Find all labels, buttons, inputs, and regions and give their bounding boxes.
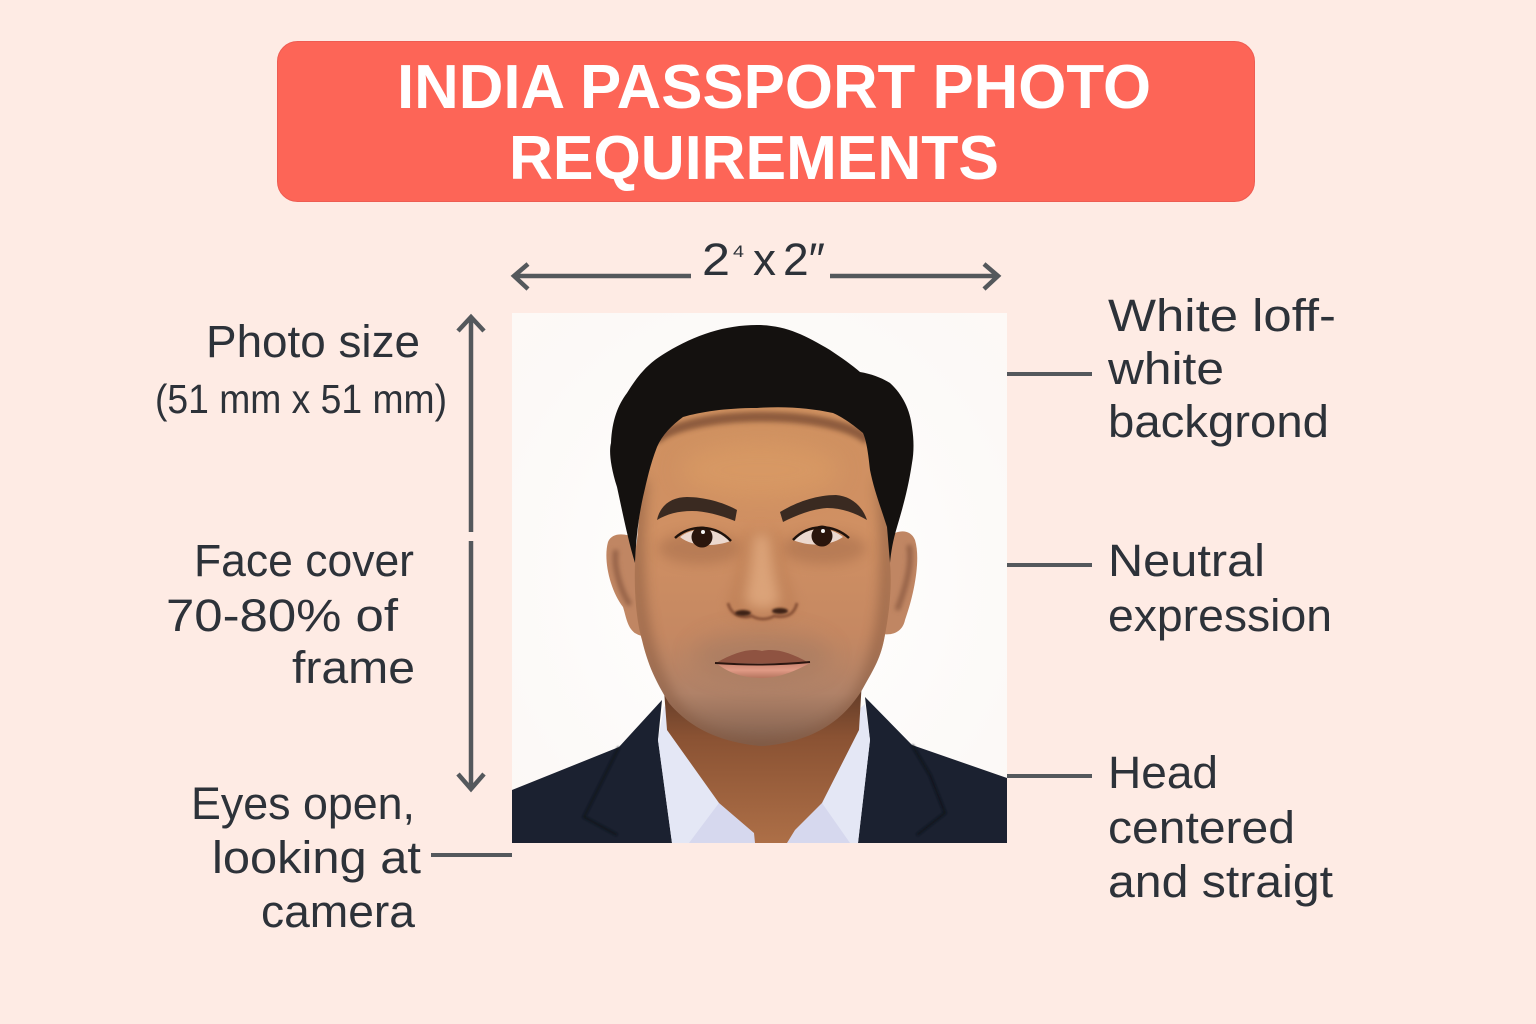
title banner <box>278 42 1254 202</box>
left label: photo size <box>155 316 447 422</box>
left label: face cover <box>166 535 415 693</box>
left label: eyes open: camera <box>261 886 416 937</box>
vertical arrow down <box>458 541 484 789</box>
connector: eyes <box>431 853 512 857</box>
mouth <box>715 650 810 678</box>
title banner: INDIA PASSPORT PHOTO <box>397 53 1151 122</box>
connector: background <box>1007 372 1092 376</box>
suit jacket <box>512 697 1007 843</box>
right label: head: and straigt <box>1108 856 1334 907</box>
width dimension arrow: 2 <box>702 234 730 285</box>
left label: face cover: frame <box>292 642 415 693</box>
right label: background: backgrond <box>1108 396 1329 447</box>
left label: eyes open: Eyes open, <box>191 778 415 829</box>
jacket lapels <box>584 745 945 835</box>
eyebrows <box>657 495 867 522</box>
connector: expression <box>1007 563 1092 567</box>
left label: eyes open <box>191 778 422 937</box>
right label: expression <box>1108 535 1332 641</box>
right label: expression: Neutral <box>1108 535 1265 586</box>
right label: background <box>1107 290 1336 447</box>
left label: photo size: Photo size <box>206 316 420 367</box>
width dimension arrow: 4 <box>733 242 744 261</box>
face shading <box>636 417 888 746</box>
right label: background: White loff- <box>1108 290 1336 341</box>
nose <box>727 530 797 620</box>
width dimension arrow: 2″ <box>783 234 825 285</box>
left label: eyes open: looking at <box>212 832 422 883</box>
right label: head <box>1108 747 1334 907</box>
neck <box>664 680 862 843</box>
hair <box>610 325 914 563</box>
ears <box>606 531 917 636</box>
width dimension arrow <box>514 234 998 289</box>
left label: face cover: 70-80% of <box>166 590 399 641</box>
right label: head: Head <box>1108 747 1218 798</box>
eyes <box>675 526 849 548</box>
portrait photo <box>512 313 1007 843</box>
right label: head: centered <box>1108 802 1295 853</box>
right label: background: white <box>1107 343 1224 394</box>
connector: head <box>1007 774 1092 778</box>
title banner: REQUIREMENTS <box>509 124 999 193</box>
vertical arrow up <box>458 317 484 532</box>
width dimension arrow: x <box>753 234 777 285</box>
lower collar shading <box>689 803 850 843</box>
right label: expression: expression <box>1108 590 1332 641</box>
shirt collar <box>658 704 870 843</box>
left label: photo size: (51 mm x 51 mm) <box>155 376 447 422</box>
left label: face cover: Face cover <box>194 535 414 586</box>
face <box>635 395 891 746</box>
